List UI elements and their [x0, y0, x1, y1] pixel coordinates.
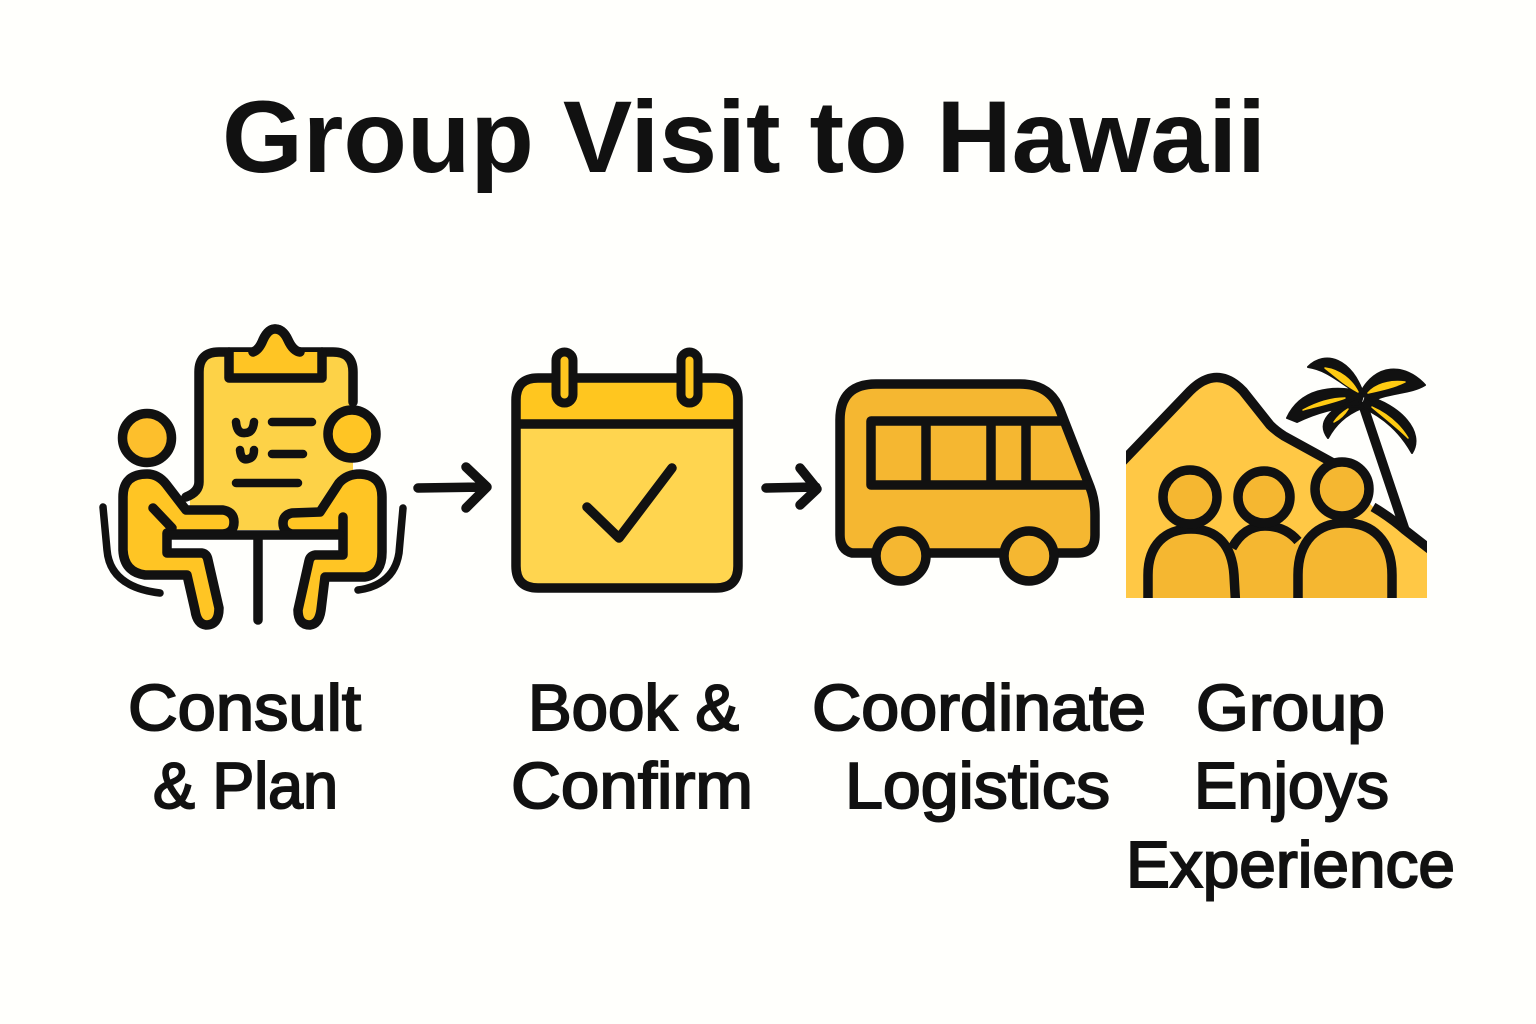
label: consult and plan: & Plan [153, 749, 338, 822]
icon: consult and plan [103, 329, 403, 625]
clipboard [186, 329, 353, 530]
palm tree [1287, 359, 1425, 530]
chairs [103, 507, 403, 593]
label: group enjoys experience: Experience [1126, 828, 1455, 901]
icon: group in Hawaii [1120, 359, 1432, 610]
right person [1298, 462, 1392, 610]
mountain outline [1120, 378, 1432, 551]
arrow: consult to book [418, 467, 487, 508]
bus wheels [876, 531, 1054, 581]
bus body [840, 384, 1095, 553]
check mark [587, 468, 672, 538]
arrow: book to coordinate [766, 468, 817, 505]
label: consult and plan: Consult [128, 671, 361, 744]
label: book and confirm: Confirm [511, 749, 753, 822]
bus windows [871, 421, 1092, 485]
label: book and confirm: Book & [528, 671, 739, 744]
left person [1148, 470, 1236, 610]
calendar body [516, 378, 738, 588]
middle person [1232, 471, 1299, 610]
title: Group Visit to Hawaii [222, 80, 1266, 194]
label: group enjoys experience: Enjoys [1194, 749, 1389, 822]
label: book and confirm [511, 671, 753, 822]
label: coordinate logistics: Logistics [845, 749, 1110, 822]
calendar rings [556, 352, 698, 403]
label: coordinate logistics [812, 671, 1146, 822]
mountain [1126, 377, 1427, 598]
left person [122, 414, 234, 625]
right person [283, 410, 382, 625]
icon: calendar [516, 352, 738, 588]
icon: bus [840, 384, 1095, 581]
label: group enjoys experience: Group [1196, 671, 1385, 744]
calendar outline [516, 378, 738, 588]
calendar header [516, 378, 738, 424]
label: coordinate logistics: Coordinate [812, 671, 1146, 744]
label: consult and plan [128, 671, 361, 822]
table [170, 535, 340, 620]
label: group enjoys experience [1126, 671, 1455, 901]
